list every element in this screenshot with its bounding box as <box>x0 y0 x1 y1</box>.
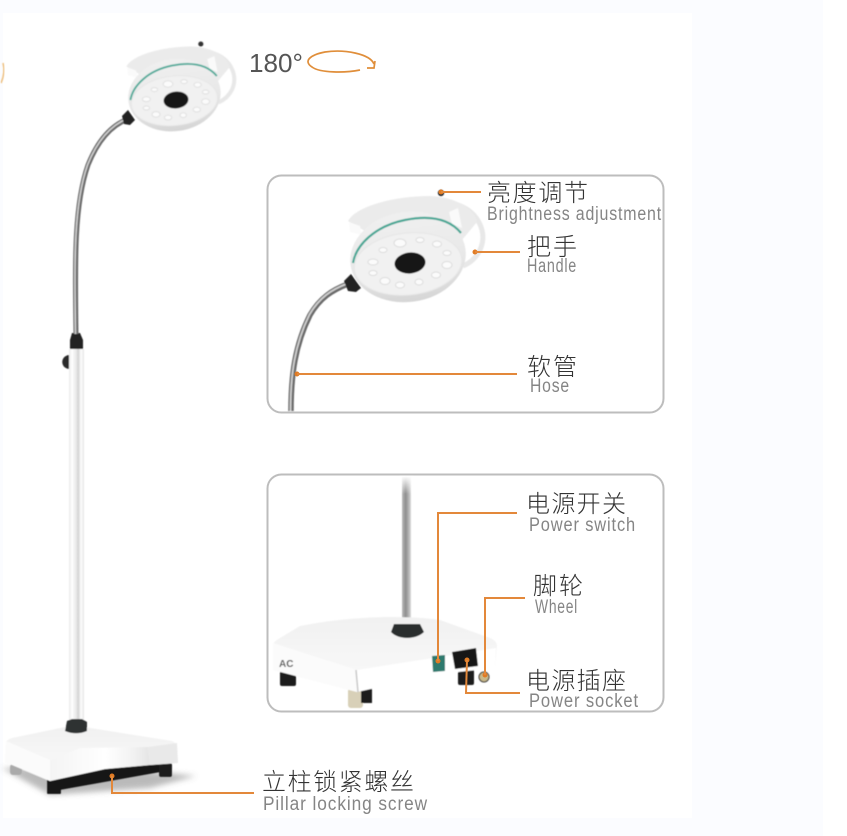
callout: power switch: 电源开关 <box>526 491 626 518</box>
base front face <box>50 747 150 781</box>
callout: pillar locking screw <box>110 769 428 815</box>
callout: pillar locking screw: 立柱锁紧螺丝 <box>262 769 414 796</box>
base collar <box>65 719 87 733</box>
callout: power socket <box>464 658 639 712</box>
lamp connector <box>122 110 135 125</box>
panel: base details <box>268 474 664 712</box>
callout: hose <box>294 354 577 397</box>
callout: brightness adjustment: 亮度调节 <box>487 180 588 207</box>
white pillar <box>69 349 84 721</box>
callout: hose: Hose <box>530 376 570 397</box>
callout: brightness adjustment: Brightness adjustment <box>487 204 662 225</box>
gooseneck hose <box>75 119 128 334</box>
callout: wheel: 脚轮 <box>533 573 583 600</box>
rotation angle label <box>249 48 375 78</box>
white canvas <box>3 13 692 818</box>
callout: hose: 软管 <box>527 354 577 381</box>
full lamp product <box>2 41 234 795</box>
callout: brightness adjustment <box>438 180 662 225</box>
callout: pillar locking screw: Pillar locking screw <box>263 794 428 815</box>
panel: lamp head details <box>268 176 664 412</box>
callout: power socket: 电源插座 <box>526 668 626 695</box>
panel base illustration <box>273 476 497 708</box>
callout: power switch: Power switch <box>529 515 636 536</box>
rotation angle label: 180° <box>249 48 303 78</box>
panel base illustration: AC <box>279 659 293 670</box>
pillar collar <box>70 333 83 349</box>
callout: handle: 把手 <box>527 234 577 261</box>
callout: handle <box>472 234 577 277</box>
right edge strip <box>823 0 847 836</box>
lamp head <box>123 41 234 137</box>
callout: wheel <box>482 573 583 678</box>
callout: wheel: Wheel <box>535 597 578 618</box>
base front-left face <box>5 741 50 781</box>
base right side shade <box>148 743 178 765</box>
base body <box>5 726 178 781</box>
callout: power switch <box>436 491 636 664</box>
panel lamp illustration <box>290 190 483 411</box>
callout: power socket: Power socket <box>529 691 639 712</box>
rotation arrow <box>308 51 375 72</box>
base feet and wheels <box>10 760 172 794</box>
base shadow <box>2 768 196 795</box>
cropped orange fragment <box>1 63 4 83</box>
callout: handle: Handle <box>527 256 577 277</box>
pillar knob <box>62 355 69 369</box>
